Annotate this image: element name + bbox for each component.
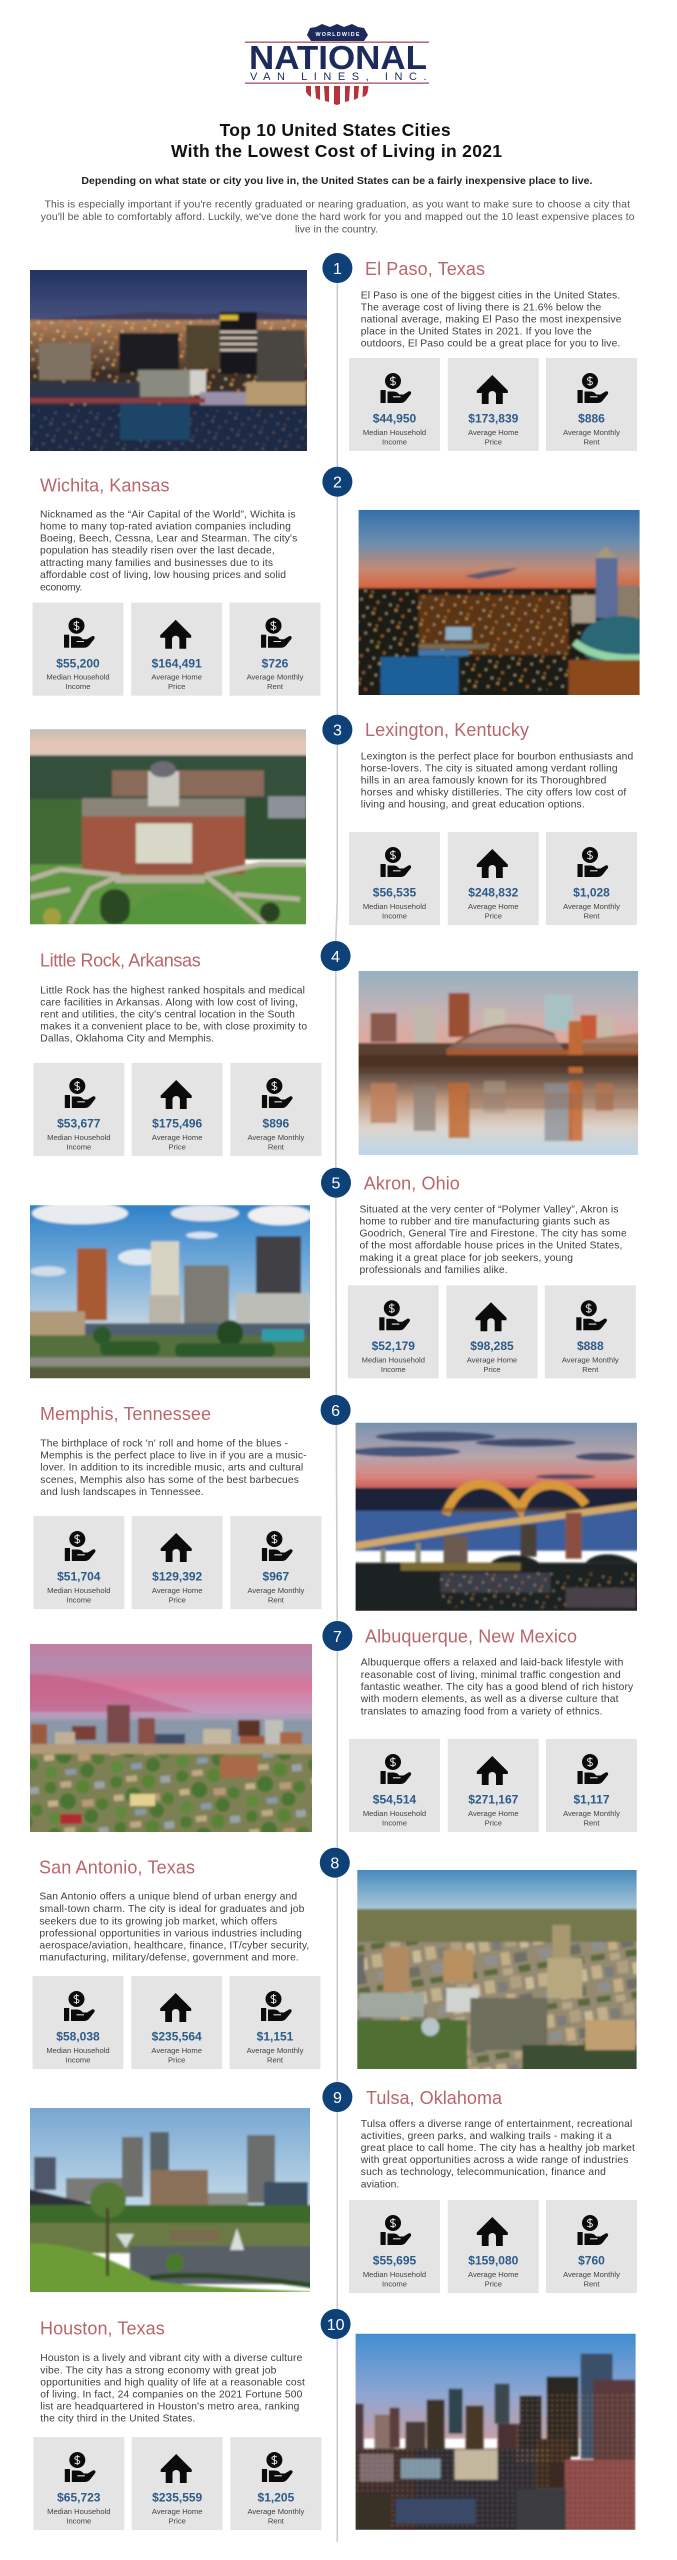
stat card: average monthly rent: Rent — [583, 912, 600, 920]
text block: Little Rock: rent and utilities, the city's central location in the South — [40, 1009, 295, 1020]
text block: Houston: opportunities and high quality of life at a reasonable cost — [40, 2377, 305, 2388]
stat card: average home price: $248,832 — [468, 886, 519, 900]
heading: Wichita, Kansas: Wichita, Kansas — [40, 476, 170, 496]
stat card: average home price: Price — [169, 1596, 186, 1604]
stat card: median household income — [348, 1285, 439, 1378]
stat card: average monthly rent — [230, 1063, 321, 1156]
stat card: average home price: Price — [168, 2056, 185, 2064]
photo: Tulsa — [30, 2108, 310, 2292]
photo: Albuquerque — [30, 1644, 312, 1832]
badge: number 4 — [321, 941, 351, 971]
stat card: median household income: Median Household — [363, 2270, 426, 2279]
stat card: average home price — [132, 1516, 223, 1609]
badge: number 9 — [322, 2082, 352, 2112]
stat card: average monthly rent: $760 — [578, 2254, 605, 2268]
text block: Tulsa — [360, 2119, 635, 2190]
text block: El Paso: national average, making El Paso the most inexpensive — [361, 315, 622, 326]
badge: number 8 — [320, 1848, 350, 1878]
text block: Memphis: scenes, Memphis also has some of the best barbecues — [40, 1475, 299, 1486]
text block: Little Rock: care facilities in Arkansas. Along with low cost of living, — [40, 997, 298, 1008]
text block: San Antonio: small-town charm. The city is ideal for graduates and job — [39, 1904, 305, 1915]
text block: Tulsa: activities, green parks, and walking trails - making it a — [361, 2131, 612, 2142]
photo: Houston — [356, 2334, 636, 2530]
text block: Akron: home to rubber and tire manufacturing giants such as — [360, 1217, 610, 1228]
text block: Tulsa: such as technology, telecommunication, finance and — [361, 2167, 606, 2178]
text block: Little Rock: makes it a convenient place to be, with close proximity to — [40, 1021, 307, 1032]
stat card: average monthly rent — [230, 1976, 320, 2069]
stat card: average monthly rent: Rent — [582, 1365, 599, 1374]
stat card: median household income: Median Household — [363, 1809, 426, 1818]
stat card: average home price: Average Home — [468, 2270, 519, 2279]
stat card: average home price: Price — [485, 2280, 502, 2288]
stat card: average home price: Average Home — [151, 2046, 202, 2055]
panel: 5 Akron, Ohio — [25, 1168, 636, 1383]
text block: San Antonio: seekers due to its growing job market, which offers — [39, 1916, 277, 1927]
stat card: median household income — [33, 1516, 124, 1609]
stat card: average home price — [448, 2200, 539, 2293]
text block: San Antonio: San Antonio offers a unique blend of urban energy and — [39, 1892, 297, 1903]
stat card: average home price: $173,839 — [468, 412, 519, 426]
stat card: average monthly rent — [230, 1516, 321, 1609]
timeline line — [336, 270, 337, 2542]
text block: Lexington: horse-lovers. The city is situated among verdant rolling — [361, 763, 618, 774]
heading: Lexington, Kentucky: Lexington, Kentucky — [365, 720, 529, 740]
panel: 8 San Antonio, Texas — [32, 1848, 642, 2075]
stat card: average monthly rent: $1,151 — [257, 2030, 294, 2044]
text block: El Paso: place in the United States in 2021. If you love the — [361, 327, 592, 338]
stat card: average home price: $271,167 — [468, 1793, 519, 1807]
stat card: average home price: Average Home — [468, 1809, 519, 1818]
stat card: median household income: Median Household — [363, 902, 426, 911]
text block: Lexington: living and housing, and great education options. — [361, 800, 585, 810]
stat card: average monthly rent — [546, 832, 637, 925]
badge: number 8: 8 — [330, 1856, 339, 1873]
stat card: median household income: $54,514 — [373, 1793, 417, 1807]
stat card: median household income — [349, 1739, 440, 1832]
stat card: average monthly rent: $896 — [263, 1117, 290, 1131]
stat card: average home price: Price — [485, 438, 502, 446]
text block: Lexington: hills in an area famously known for its Thoroughbred — [361, 775, 607, 786]
stat card: average home price: Average Home — [151, 673, 202, 682]
intro paragraph: you'll be able to comfortably afford. Luckily, we've done the hard work for you and mapped out the 10 least expensive places to — [41, 212, 635, 223]
logo: National Van Lines — [245, 24, 429, 105]
stat card: average monthly rent: Average Monthly — [247, 1586, 305, 1595]
stat card: median household income: $58,038 — [56, 2030, 100, 2044]
text block: Albuquerque: Albuquerque offers a relaxed and laid-back lifestyle with — [361, 1658, 624, 1669]
stat card: average home price — [446, 1285, 538, 1378]
stat card: average home price — [448, 358, 539, 451]
heading: El Paso, Texas: El Paso, Texas — [365, 259, 485, 279]
text block: Memphis: lover. In addition to its incredible music, arts and cultural — [40, 1463, 303, 1474]
badge: number 1: 1 — [333, 261, 342, 278]
text block: Memphis: and lush landscapes in Tennessee. — [40, 1487, 204, 1498]
stat card: average monthly rent: Rent — [268, 1596, 285, 1604]
stat card: average monthly rent — [545, 1285, 636, 1378]
stat card: average monthly rent: Rent — [583, 438, 600, 446]
logo: National Van Lines: NATIONAL — [249, 40, 427, 77]
stat card: average monthly rent: Rent — [268, 1142, 285, 1152]
text block: Albuquerque: reasonable cost of living, minimal traffic congestion and — [361, 1670, 621, 1681]
stat card: average home price: $159,080 — [468, 2254, 519, 2268]
stat card: median household income: $56,535 — [373, 886, 417, 900]
text block: Wichita: attracting many families and businesses due to its — [40, 558, 273, 569]
text block: Akron: professionals and families alike. — [360, 1265, 508, 1276]
stat card: median household income: Income — [66, 1596, 91, 1604]
text block: Akron: Situated at the very center of “Polymer Valley”, Akron is — [360, 1205, 618, 1216]
badge: number 10: 10 — [327, 2317, 345, 2334]
stat card: average home price — [131, 603, 222, 696]
subtitle: Depending on what state or city you live in, the United States can be a fairly inexpensive place to live. — [81, 175, 592, 187]
text block: San Antonio: manufacturing, military/defense, government and more. — [39, 1953, 299, 1964]
text block: Houston: Houston is a lively and vibrant city with a diverse culture — [40, 2353, 303, 2364]
badge: number 5: 5 — [332, 1176, 341, 1193]
text block: El Paso — [361, 291, 622, 350]
stat card: average home price: $129,392 — [152, 1570, 203, 1584]
stat card: average monthly rent — [546, 2200, 637, 2293]
stat card: median household income: Median Household — [46, 2046, 110, 2055]
text block: Memphis — [40, 1439, 307, 1498]
photo: Little Rock — [358, 971, 638, 1155]
badge: number 4: 4 — [331, 949, 340, 966]
text block: San Antonio — [39, 1892, 309, 1964]
stat card: median household income: Median Household — [47, 2507, 110, 2516]
stat card: median household income — [32, 603, 124, 696]
stat card: average home price: $235,564 — [152, 2030, 202, 2044]
stat card: average monthly rent: Rent — [268, 2516, 285, 2526]
photo: El Paso — [30, 270, 307, 451]
stat card: median household income — [349, 358, 440, 451]
stat card: average home price: Price — [485, 912, 502, 920]
stat card: average monthly rent: Rent — [267, 2056, 284, 2064]
text block: Wichita: home to many top-rated aviation companies including — [40, 521, 291, 532]
stat card: average monthly rent: Average Monthly — [563, 2270, 620, 2279]
badge: number 3: 3 — [333, 723, 342, 740]
text block: Akron — [360, 1205, 627, 1276]
text block: Albuquerque — [360, 1658, 634, 1717]
panel: 2 Wichita, Kansas — [32, 467, 661, 700]
text block: El Paso: outdoors, El Paso could be a great place for you to live. — [361, 339, 620, 350]
badge: number 10 — [321, 2309, 351, 2339]
stat card: average home price — [448, 832, 539, 925]
badge: number 6 — [321, 1395, 351, 1425]
badge: number 5 — [321, 1168, 351, 1198]
stat card: average monthly rent: $886 — [578, 412, 605, 426]
stat card: average monthly rent: Average Monthly — [247, 673, 304, 682]
text block: Houston: vibe. The city has a strong economy with great job — [40, 2365, 277, 2376]
title: With the Lowest Cost of Living in 2021 — [171, 141, 502, 161]
text block: Akron: Goodrich, General Tire and Firestone. The city has some — [360, 1229, 627, 1240]
stat card: average monthly rent: Rent — [583, 1818, 600, 1828]
stat card: average monthly rent: Rent — [583, 2280, 600, 2288]
title: Top 10 United States Cities — [220, 120, 451, 140]
text block: Memphis: The birthplace of rock 'n' roll and home of the blues - — [40, 1439, 288, 1450]
text block: Wichita: Nicknamed as the “Air Capital of the World”, Wichita is — [40, 509, 296, 520]
text block: Lexington: horses and whisky distilleries. The city offers low cost of — [361, 787, 626, 798]
stat card: median household income — [32, 1976, 124, 2069]
badge: number 2: 2 — [333, 475, 342, 492]
stat card: median household income — [349, 832, 440, 925]
stat card: average monthly rent: $1,028 — [573, 886, 610, 900]
stat card: median household income: Median Household — [362, 1355, 425, 1364]
stat card: average monthly rent: Average Monthly — [563, 902, 620, 911]
stat card: average home price: Average Home — [467, 1355, 517, 1364]
stat card: average monthly rent: $888 — [577, 1339, 604, 1353]
panel: 6 Memphis, Tennessee — [33, 1395, 643, 1618]
stat card: average home price — [132, 2437, 223, 2530]
text block: Little Rock: Little Rock has the highest ranked hospitals and medical — [40, 985, 305, 996]
stat card: average monthly rent: Average Monthly — [247, 2046, 304, 2055]
panel: 3 Lexington, Kentucky — [25, 715, 637, 929]
stat card: median household income: $55,200 — [56, 656, 100, 670]
photo: Akron — [30, 1205, 310, 1378]
text block: Tulsa: Tulsa offers a diverse range of entertainment, recreational — [361, 2119, 632, 2130]
stat card: average home price: $98,285 — [470, 1339, 514, 1353]
stat card: average monthly rent: Average Monthly — [247, 1133, 305, 1142]
stat card: average monthly rent — [546, 1739, 637, 1832]
stat card: median household income: Income — [382, 1818, 407, 1828]
stat card: median household income: Income — [66, 2056, 90, 2064]
text block: San Antonio: aerospace/aviation, healthcare, finance, IT/cyber security, — [39, 1940, 309, 1951]
text block: Akron: making it a great place for job seekers, young — [360, 1253, 573, 1264]
stat card: average monthly rent: Average Monthly — [247, 2507, 305, 2516]
stat card: average monthly rent — [230, 2437, 321, 2530]
stat card: median household income: Income — [66, 1142, 91, 1152]
stat card: median household income: $53,677 — [57, 1117, 101, 1131]
heading: Tulsa, Oklahoma: Tulsa, Oklahoma — [366, 2088, 503, 2108]
intro paragraph: This is especially important if you're recently graduated or nearing graduation, as you want to make sure to choose a city that — [45, 200, 630, 210]
panel: 1 El Paso, Texas — [25, 253, 637, 455]
stat card: median household income — [33, 1063, 124, 1156]
heading: Houston, Texas: Houston, Texas — [40, 2318, 165, 2338]
stat card: median household income: $51,704 — [57, 1570, 101, 1584]
stat card: average monthly rent: $1,205 — [258, 2491, 295, 2505]
logo: National Van Lines: WORLDWIDE — [316, 32, 360, 38]
stat card: average home price: Average Home — [468, 428, 519, 437]
heading: Albuquerque, New Mexico: Albuquerque, New Mexico — [365, 1627, 577, 1647]
stat card: median household income: $52,179 — [372, 1339, 415, 1353]
stat card: median household income: Income — [381, 1365, 406, 1374]
stat card: average monthly rent: Average Monthly — [562, 1355, 619, 1364]
badge: number 1 — [322, 253, 352, 283]
panel: 7 Albuquerque, New Mexico — [25, 1621, 637, 1838]
text block: Albuquerque: translates to amazing food from a variety of ethnics. — [361, 1706, 602, 1717]
text block: Tulsa: great place to call home. The city has a healthy job market — [361, 2143, 635, 2154]
stat card: average home price: Price — [168, 682, 185, 691]
photo: San Antonio — [357, 1870, 637, 2069]
stat card: average home price — [132, 1063, 223, 1156]
stat card: average home price: Price — [485, 1818, 502, 1828]
photo: Lexington — [30, 729, 306, 924]
text block: Wichita — [40, 509, 297, 593]
stat card: median household income: $65,723 — [57, 2491, 101, 2505]
text block: El Paso: The average cost of living there is 21.6% below the — [361, 303, 601, 314]
stat card: median household income: $44,950 — [373, 412, 417, 426]
stat card: average home price: Average Home — [152, 1133, 202, 1142]
stat card: median household income: Median Household — [363, 428, 426, 437]
text block: Little Rock: Dallas, Oklahoma City and Memphis. — [40, 1034, 214, 1044]
stat card: median household income: Income — [382, 438, 407, 446]
stat card: average monthly rent: Average Monthly — [563, 428, 620, 437]
stat card: average monthly rent: $967 — [263, 1570, 290, 1584]
stat card: average home price — [448, 1739, 539, 1832]
badge: number 7: 7 — [333, 1629, 342, 1646]
stat card: average home price: Price — [169, 1142, 186, 1152]
intro paragraph — [41, 200, 635, 236]
heading: Akron, Ohio: Akron, Ohio — [364, 1173, 460, 1193]
panel: 4 Little Rock, Arkansas — [33, 941, 644, 1163]
photo: Wichita — [358, 510, 640, 695]
text block: Albuquerque: fantastic weather. The city has a good blend of rich history — [361, 1682, 634, 1693]
text block: Little Rock — [40, 985, 307, 1044]
stat card: median household income — [33, 2437, 124, 2530]
text block: Houston: of living. In fact, 24 companies on the 2021 Fortune 500 — [40, 2389, 303, 2400]
stat card: median household income: $55,695 — [373, 2254, 417, 2268]
text block: Houston — [40, 2353, 305, 2425]
stat card: average home price: Price — [483, 1365, 501, 1374]
text block: El Paso: El Paso is one of the biggest cities in the United States. — [361, 291, 620, 302]
panel: 10 Houston, Texas — [33, 2309, 641, 2535]
stat card: median household income: Median Household — [47, 1586, 110, 1595]
text block: Houston: list are headquartered in Houston's metro area, ranking — [40, 2401, 300, 2412]
text block: Wichita: population has steadily risen over the last decade, — [40, 546, 275, 557]
stat card: median household income: Median Household — [46, 673, 110, 682]
text block: Tulsa: with great opportunities across a wide range of industries — [360, 2155, 628, 2166]
stat card: median household income: Median Household — [47, 1133, 110, 1142]
badge: number 7 — [322, 1621, 352, 1651]
text block: Akron: of the most affordable house prices in the United States, — [360, 1241, 622, 1252]
badge: number 6: 6 — [331, 1403, 340, 1420]
text block: Lexington — [361, 751, 633, 810]
stat card: median household income: Income — [382, 2280, 407, 2288]
stat card: median household income — [349, 2200, 440, 2293]
text block: Albuquerque: with modern elements, as well as a diverse culture that — [360, 1694, 619, 1705]
heading: Memphis, Tennessee: Memphis, Tennessee — [40, 1404, 211, 1424]
stat card: average home price — [131, 1976, 222, 2069]
heading: San Antonio, Texas: San Antonio, Texas — [39, 1857, 195, 1877]
heading: Little Rock, Arkansas: Little Rock, Arkansas — [40, 951, 201, 971]
title — [171, 120, 502, 161]
text block: Tulsa: aviation. — [361, 2179, 399, 2190]
badge: number 9: 9 — [333, 2090, 342, 2107]
logo: National Van Lines: VAN LINES, INC. — [250, 71, 427, 83]
badge: number 2 — [322, 467, 352, 497]
photo: Memphis — [356, 1422, 637, 1611]
stat card: average monthly rent: $1,117 — [573, 1793, 610, 1807]
text block: Lexington: Lexington is the perfect place for bourbon enthusiasts and — [361, 751, 633, 762]
stat card: average home price: Price — [169, 2516, 186, 2526]
stat card: average home price: $164,491 — [152, 656, 202, 670]
text block: Wichita: Boeing, Beech, Cessna, Lear and Stearman. The city's — [40, 534, 297, 544]
stat card: average monthly rent — [546, 358, 637, 451]
stat card: average home price: Average Home — [152, 2507, 202, 2516]
stat card: median household income: Income — [382, 912, 407, 920]
badge: number 3 — [322, 715, 352, 745]
text block: San Antonio: professional opportunities in various industries including — [39, 1928, 302, 1939]
text block: Memphis: Memphis is the perfect place to live in if you are a music- — [40, 1451, 307, 1462]
text block: Houston: the city third in the United States. — [40, 2414, 195, 2425]
stat card: average monthly rent: Average Monthly — [563, 1809, 620, 1818]
stat card: median household income: Income — [66, 2516, 91, 2526]
stat card: average monthly rent — [230, 603, 320, 696]
stat card: median household income: Income — [66, 682, 90, 691]
panel: 9 Tulsa, Oklahoma — [25, 2082, 637, 2297]
text block: Wichita: economy. — [40, 582, 82, 593]
stat card: average monthly rent: $726 — [262, 656, 289, 670]
intro paragraph: live in the country. — [295, 225, 378, 236]
stat card: average monthly rent: Rent — [267, 682, 284, 691]
stat card: average home price: Average Home — [468, 902, 519, 911]
stat card: average home price: $175,496 — [152, 1117, 203, 1131]
text block: Wichita: affordable cost of living, low housing prices and solid — [40, 570, 286, 581]
stat card: average home price: Average Home — [152, 1586, 202, 1595]
stat card: average home price: $235,559 — [152, 2491, 203, 2505]
